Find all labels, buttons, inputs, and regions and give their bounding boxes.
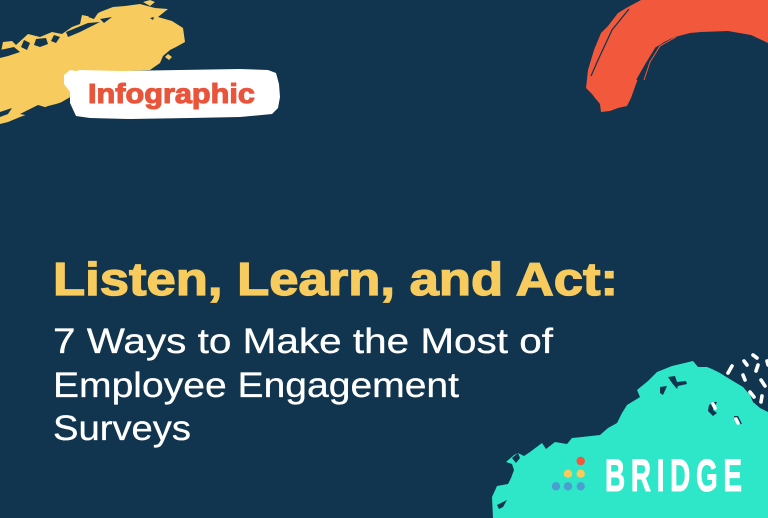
title: Listen, Learn, and Act: <box>53 253 618 305</box>
white confetti dashes <box>713 355 768 423</box>
subtitle <box>53 322 553 448</box>
yellow brush stroke <box>0 0 185 124</box>
yellow brush texture gaps <box>0 13 154 117</box>
subtitle: Employee Engagement <box>53 366 459 405</box>
coral brush streaks <box>591 9 629 76</box>
teal brush shape <box>492 361 768 518</box>
Bridge wordmark: BRIDGE <box>605 450 742 501</box>
white brush badge <box>64 69 280 119</box>
teal shape dark flecks <box>668 376 687 389</box>
coral brush arc <box>586 0 768 112</box>
label: Infographic badge <box>64 69 280 119</box>
badge text: Infographic <box>88 78 255 109</box>
icon: Bridge logo dots <box>552 457 585 490</box>
subtitle: Surveys <box>53 409 191 448</box>
subtitle: 7 Ways to Make the Most of <box>53 322 553 361</box>
